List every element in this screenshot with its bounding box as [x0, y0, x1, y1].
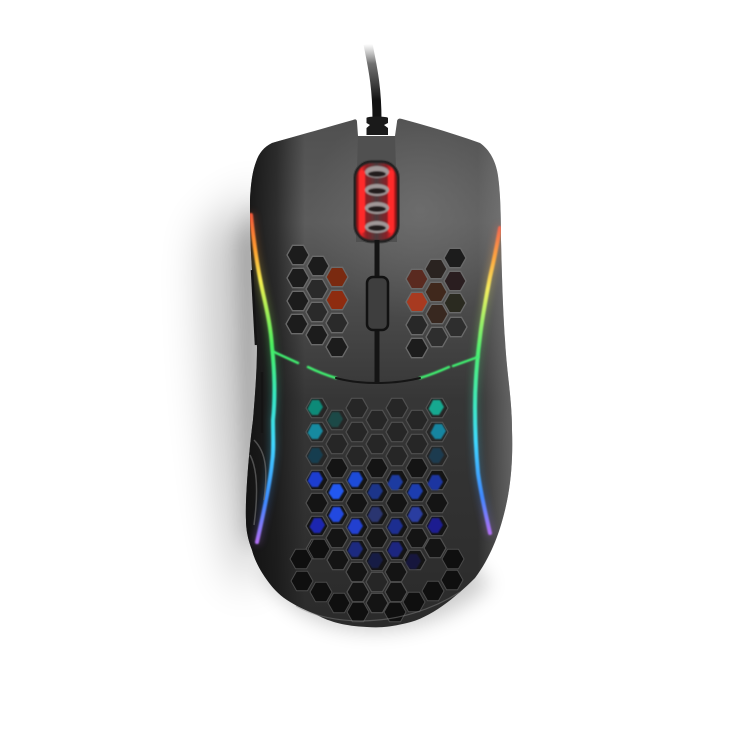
- right button honeycomb vents: [406, 248, 467, 358]
- rim highlight: [296, 592, 460, 621]
- left button honeycomb vents: [286, 245, 348, 357]
- mouse body: [240, 100, 520, 630]
- right RGB light strip: [475, 228, 500, 533]
- palm honeycomb vents: [306, 398, 448, 613]
- cable: [366, 44, 388, 135]
- RGB light seen through the palm vents: [308, 400, 446, 569]
- side thumb buttons: [252, 270, 262, 433]
- illustration: RGB gaming mouse, top view: [183, 46, 512, 640]
- centre green light arc: [274, 352, 478, 383]
- scroll wheel, red glow: [356, 163, 397, 240]
- logo reflection on left side: [250, 440, 266, 525]
- lower rim honeycomb vents: [290, 539, 464, 622]
- soft drop shadow: [204, 190, 490, 630]
- scroll wheel channel: [354, 136, 400, 243]
- centre seam and DPI button: [367, 240, 388, 383]
- left RGB light strip: [251, 215, 274, 542]
